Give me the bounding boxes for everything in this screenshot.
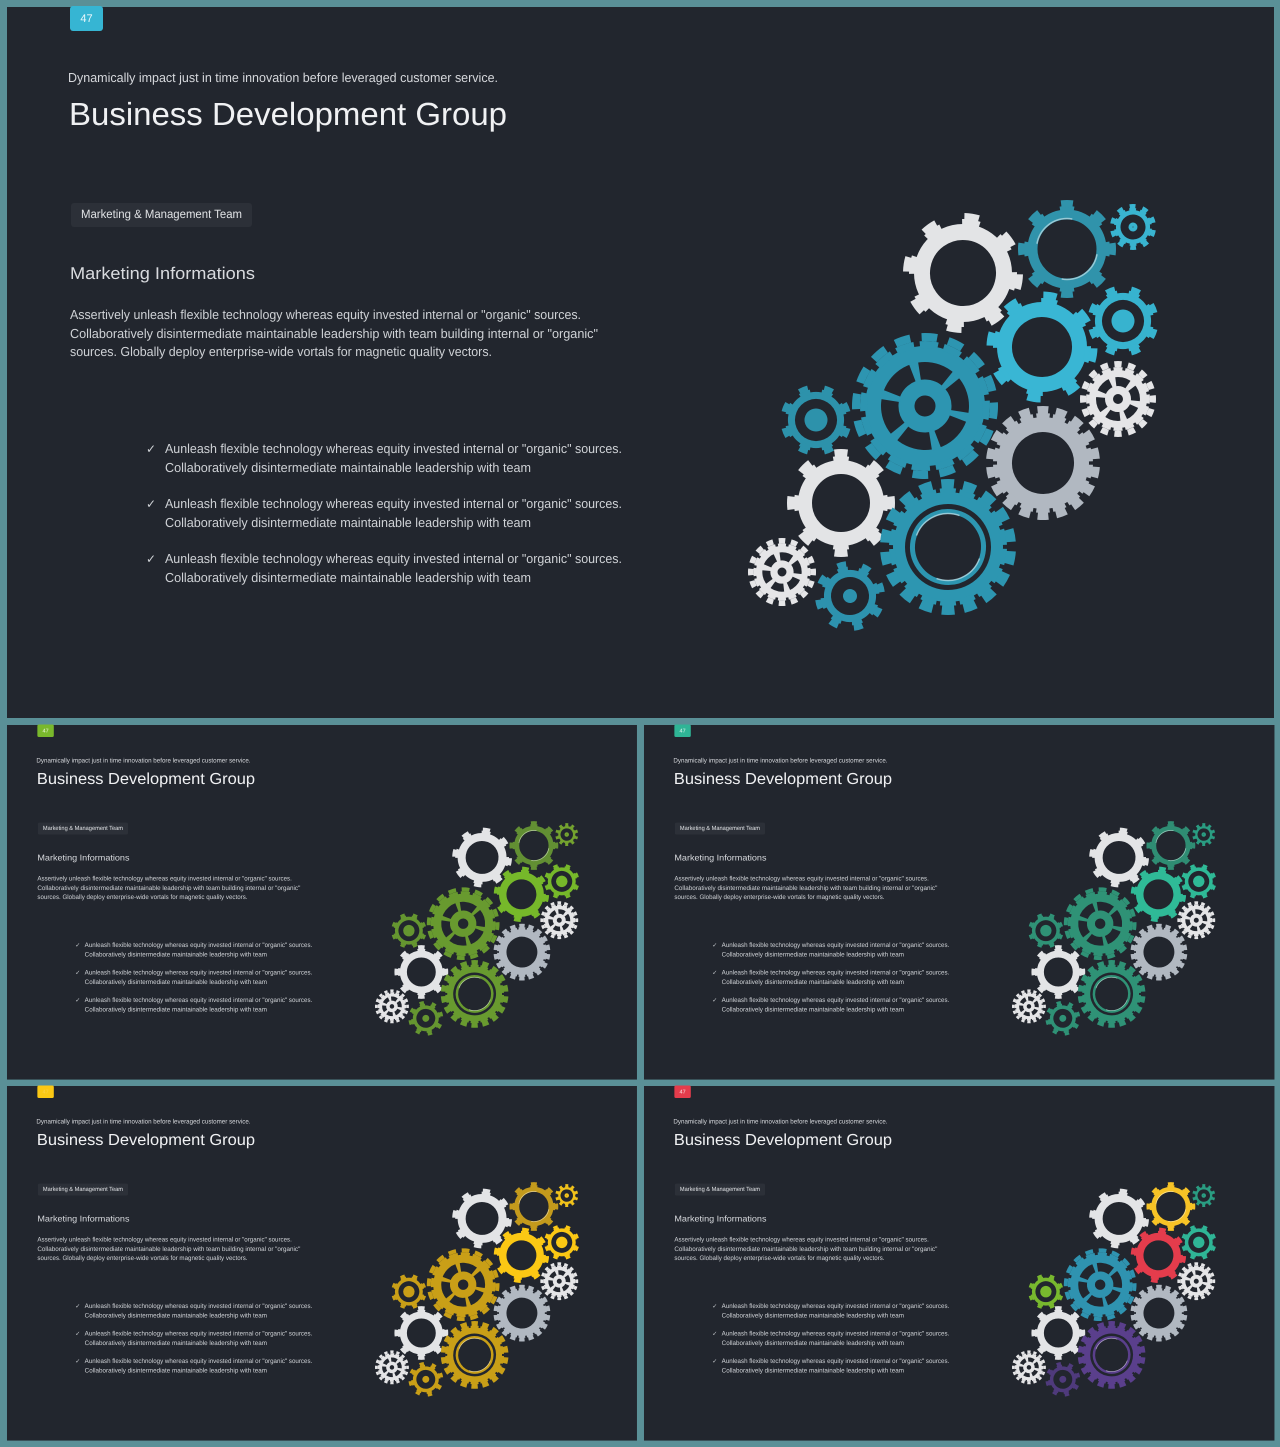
list: check items: Collaboratively disintermediate maintainable leadership with team (722, 951, 904, 958)
text block: description: Assertively unleash flexible technology whereas equity invested internal or "organic" sources. (674, 1235, 929, 1243)
icon: small gear left (387, 1270, 430, 1313)
list: check items: Aunleash flexible technology whereas equity invested internal or "organic" sources. (722, 1330, 949, 1337)
icon: white gear lower (1033, 947, 1083, 997)
icon: small yellow gear (540, 1221, 583, 1264)
list: check items: Aunleash flexible technology whereas equity invested internal or "organic" sources. (722, 996, 949, 1003)
tag: team label: Marketing & Management Team (680, 825, 760, 832)
heading: marketing informations: Marketing Informations (70, 264, 255, 283)
list: check items: ✓ (712, 1330, 717, 1337)
heading: marketing informations: Marketing Informations (37, 853, 130, 862)
gear cluster (1013, 1183, 1220, 1401)
gear cluster (376, 1183, 583, 1401)
icon: small yellow gear top (554, 1183, 580, 1209)
icon: grey gear (982, 402, 1104, 524)
tag: team label: Marketing & Management Team (43, 825, 123, 832)
list: check items: Collaboratively disintermediate maintainable leadership with team (722, 1312, 904, 1319)
tag: team label: Marketing & Management Team (43, 1186, 123, 1193)
list: check items (75, 1302, 312, 1374)
list: check items: ✓ (712, 969, 717, 976)
icon: olive ring gear (511, 823, 557, 868)
icon: white spoked gear left (1013, 991, 1045, 1022)
icon: small teal gear (1177, 1221, 1220, 1264)
list: check items: Aunleash flexible technology whereas equity invested internal or "organic" sources. (165, 441, 622, 456)
icon: small gear bottom (404, 997, 448, 1040)
list: check items (712, 941, 949, 1013)
icon: white spoked gear left (1013, 1352, 1045, 1383)
badge: page number (674, 724, 691, 737)
tag: team label (71, 203, 252, 227)
icon: white spoked gear left (376, 991, 408, 1022)
list: check items: Collaboratively disintermediate maintainable leadership with team (165, 515, 531, 530)
icon: grey gear (491, 922, 553, 983)
icon: bright yellow gear (492, 1226, 551, 1285)
list: check items: Aunleash flexible technology whereas equity invested internal or "organic" sources. (85, 1330, 312, 1337)
heading: marketing informations: Marketing Informations (674, 1214, 767, 1223)
icon: white spoked gear left (376, 1352, 408, 1383)
badge: page number (70, 6, 103, 31)
list: check items: Collaboratively disintermediate maintainable leadership with team (85, 951, 267, 958)
text block: description (674, 1235, 937, 1261)
tag: team label (675, 823, 765, 835)
icon: white spoked gear right (542, 1264, 577, 1299)
panel: green slide (7, 724, 637, 1080)
panel: teal-green slide (644, 724, 1274, 1080)
title: Business Development Group (37, 769, 255, 787)
list: check items: ✓ (146, 442, 156, 456)
tag: team label: Marketing & Management Team (81, 207, 242, 221)
list: check items: ✓ (75, 1330, 80, 1337)
icon: grey gear (1128, 922, 1190, 983)
icon: small gear bottom (806, 552, 894, 640)
icon: white spoked gear right (1083, 364, 1153, 434)
icon: large purple ring gear (1075, 1319, 1148, 1391)
list: check items: Aunleash flexible technology whereas equity invested internal or "organic" sources. (85, 1357, 312, 1364)
icon: ochre ring gear (511, 1184, 557, 1229)
gear cluster (751, 201, 1166, 640)
list: check items: Aunleash flexible technology whereas equity invested internal or "organic" sources. (85, 941, 312, 949)
list: check items: ✓ (712, 1303, 717, 1310)
list: check items: Collaboratively disintermediate maintainable leadership with team (85, 1312, 267, 1319)
icon: small olive gear (554, 822, 580, 848)
text block: description: sources. Globally deploy enterprise-wide vortals for magnetic quality vectors. (37, 893, 248, 900)
list: check items: Collaboratively disintermediate maintainable leadership with team (85, 1339, 267, 1346)
icon: bright teal gear (1129, 865, 1188, 924)
list: check items: ✓ (75, 1357, 80, 1364)
tag: team label (675, 1184, 765, 1196)
icon: teal ring gear (1022, 204, 1112, 294)
icon: white spoked gear right (1179, 903, 1214, 938)
list: check items: Aunleash flexible technology whereas equity invested internal or "organic" sources. (165, 551, 622, 566)
list: check items: Collaboratively disintermediate maintainable leadership with team (165, 570, 531, 585)
icon: large ring gear (875, 474, 1021, 620)
title: Business Development Group (674, 1130, 892, 1148)
icon: white gear top (899, 209, 1027, 337)
icon: grey gear (1128, 1283, 1190, 1344)
panel: main slide (blue) (7, 6, 1274, 718)
panel: yellow slide (7, 1085, 637, 1441)
icon: green ring gear (1148, 823, 1194, 868)
tag: team label: Marketing & Management Team (680, 1186, 760, 1193)
icon: bright green gear (492, 865, 551, 924)
title: Business Development Group (37, 1130, 255, 1148)
icon: white gear lower (1033, 1308, 1083, 1358)
icon: small gear bottom (404, 1358, 448, 1401)
list: check items: Aunleash flexible technology whereas equity invested internal or "organic" sources. (85, 1302, 312, 1310)
list: check items: Aunleash flexible technology whereas equity invested internal or "organic" sources. (85, 969, 312, 976)
icon: small gear left (1024, 909, 1067, 952)
text block: description (674, 874, 937, 900)
icon: cyan gear (983, 288, 1101, 406)
text block: description: Assertively unleash flexible technology whereas equity invested internal or "organic" sources. (37, 1235, 292, 1243)
list: check items: Aunleash flexible technology whereas equity invested internal or "organic" sources. (722, 1302, 949, 1310)
icon: white gear lower (396, 1308, 446, 1358)
badge: page number (674, 1085, 691, 1098)
icon: grey gear (491, 1283, 553, 1344)
icon: large spoked gear (851, 332, 999, 480)
panel: multicolour slide (644, 1085, 1274, 1441)
list: check items: Collaboratively disintermediate maintainable leadership with team (85, 978, 267, 985)
icon: white spoked gear left (751, 541, 813, 603)
badge: page number: 47 (43, 728, 49, 734)
badge: page number: 47 (680, 728, 686, 734)
subtitle: Dynamically impact just in time innovation before leveraged customer service. (673, 1117, 888, 1125)
badge: page number: 47 (43, 1089, 49, 1095)
subtitle: Dynamically impact just in time innovation before leveraged customer service. (36, 1117, 251, 1125)
list: check items: ✓ (712, 1357, 717, 1364)
icon: small green gear (540, 860, 583, 903)
title: Business Development Group (674, 769, 892, 787)
list: check items: Collaboratively disintermediate maintainable leadership with team (722, 978, 904, 985)
subtitle: Dynamically impact just in time innovation before leveraged customer service. (673, 756, 888, 764)
icon: large spoked gear (1063, 887, 1137, 960)
icon: large ring gear (438, 1319, 511, 1391)
list: check items: Collaboratively disintermediate maintainable leadership with team (85, 1005, 267, 1013)
list: check items: ✓ (75, 969, 80, 976)
list: check items: Collaboratively disintermediate maintainable leadership with team (722, 1366, 904, 1374)
text block: description (37, 874, 300, 900)
heading: marketing informations: Marketing Informations (37, 1214, 130, 1223)
text block: description: sources. Globally deploy enterprise-wide vortals for magnetic quality vectors. (37, 1254, 248, 1261)
heading: marketing informations: Marketing Informations (674, 853, 767, 862)
icon: white gear top (1087, 826, 1151, 889)
icon: small green gear left (1024, 1270, 1067, 1313)
list: check items: ✓ (146, 552, 156, 566)
list: check items: ✓ (75, 1303, 80, 1310)
icon: small gear bottom (1041, 997, 1085, 1040)
icon: small gear left (773, 377, 859, 463)
list: check items: Collaboratively disintermediate maintainable leadership with team (85, 1366, 267, 1374)
list: check items: Collaboratively disintermediate maintainable leadership with team (722, 1339, 904, 1346)
icon: large blue spoked gear (1063, 1248, 1137, 1321)
text block: description: Collaboratively disintermediate maintainable leadership with team building internal or "organic" (674, 1245, 937, 1252)
title: Business Development Group (69, 96, 507, 132)
list: check items: ✓ (712, 942, 717, 949)
badge: page number: 47 (80, 13, 93, 25)
icon: large ring gear (1075, 958, 1148, 1030)
text block: description: sources. Globally deploy enterprise-wide vortals for magnetic quality vectors. (674, 1254, 885, 1261)
text block: description: Assertively unleash flexible technology whereas equity invested internal or "organic" sources. (37, 874, 292, 882)
text block: description: Collaboratively disintermediate maintainable leadership with team building internal or "organic" (674, 884, 937, 891)
icon: white gear lower (791, 453, 891, 553)
list: check items: Aunleash flexible technology whereas equity invested internal or "organic" sources. (722, 941, 949, 949)
list: check items: Aunleash flexible technology whereas equity invested internal or "organic" sources. (722, 1357, 949, 1364)
subtitle: Dynamically impact just in time innovation before leveraged customer service. (68, 70, 498, 85)
badge: page number (37, 1085, 54, 1098)
list: check items (712, 1302, 949, 1374)
icon: white gear top (1087, 1187, 1151, 1250)
badge: page number: 47 (680, 1089, 686, 1095)
text block: description: sources. Globally deploy enterprise-wide vortals for magnetic quality vectors. (70, 344, 492, 359)
text block: description: sources. Globally deploy enterprise-wide vortals for magnetic quality vectors. (674, 893, 885, 900)
list: check items (75, 941, 312, 1013)
icon: white gear top (450, 826, 514, 889)
list: check items: ✓ (712, 996, 717, 1003)
icon: yellow ring gear (1148, 1184, 1194, 1229)
list: check items: ✓ (146, 497, 156, 511)
icon: large spoked gear (426, 1248, 500, 1321)
icon: small purple gear bottom (1041, 1358, 1085, 1401)
text block: description: Collaboratively disintermediate maintainable leadership with team building internal or "organic" (37, 884, 300, 891)
list: check items: ✓ (75, 996, 80, 1003)
list: check items: ✓ (75, 942, 80, 949)
list: check items: Aunleash flexible technology whereas equity invested internal or "organic" sources. (722, 969, 949, 976)
icon: large spoked gear (426, 887, 500, 960)
gear cluster (1013, 822, 1220, 1040)
icon: white gear top (450, 1187, 514, 1250)
text block: description (37, 1235, 300, 1261)
tag: team label (38, 823, 128, 835)
icon: white gear lower (396, 947, 446, 997)
badge: page number (37, 724, 54, 737)
text block: description (70, 307, 598, 359)
subtitle: Dynamically impact just in time innovation before leveraged customer service. (36, 756, 251, 764)
icon: white spoked gear right (1179, 1264, 1214, 1299)
list: check items (146, 441, 622, 585)
gear cluster (376, 822, 583, 1040)
tag: team label (38, 1184, 128, 1196)
icon: small green gear (1191, 822, 1217, 848)
icon: small teal gear (1177, 860, 1220, 903)
text block: description: Collaboratively disintermediate maintainable leadership with team building internal or "organic" (70, 326, 598, 341)
icon: small teal gear top (1191, 1183, 1217, 1209)
text block: description: Assertively unleash flexible technology whereas equity invested internal or "organic" sources. (70, 307, 581, 322)
list: check items: Aunleash flexible technology whereas equity invested internal or "organic" sources. (85, 996, 312, 1003)
icon: large ring gear (438, 958, 511, 1030)
icon: white spoked gear right (542, 903, 577, 938)
icon: small teal gear (1107, 201, 1159, 253)
text block: description: Assertively unleash flexible technology whereas equity invested internal or "organic" sources. (674, 874, 929, 882)
icon: small gear left (387, 909, 430, 952)
icon: red gear (1129, 1226, 1188, 1285)
list: check items: Collaboratively disintermediate maintainable leadership with team (165, 460, 531, 475)
text block: description: Collaboratively disintermediate maintainable leadership with team building internal or "organic" (37, 1245, 300, 1252)
icon: small cyan gear (1080, 278, 1166, 364)
list: check items: Aunleash flexible technology whereas equity invested internal or "organic" sources. (165, 496, 622, 511)
list: check items: Collaboratively disintermediate maintainable leadership with team (722, 1005, 904, 1013)
